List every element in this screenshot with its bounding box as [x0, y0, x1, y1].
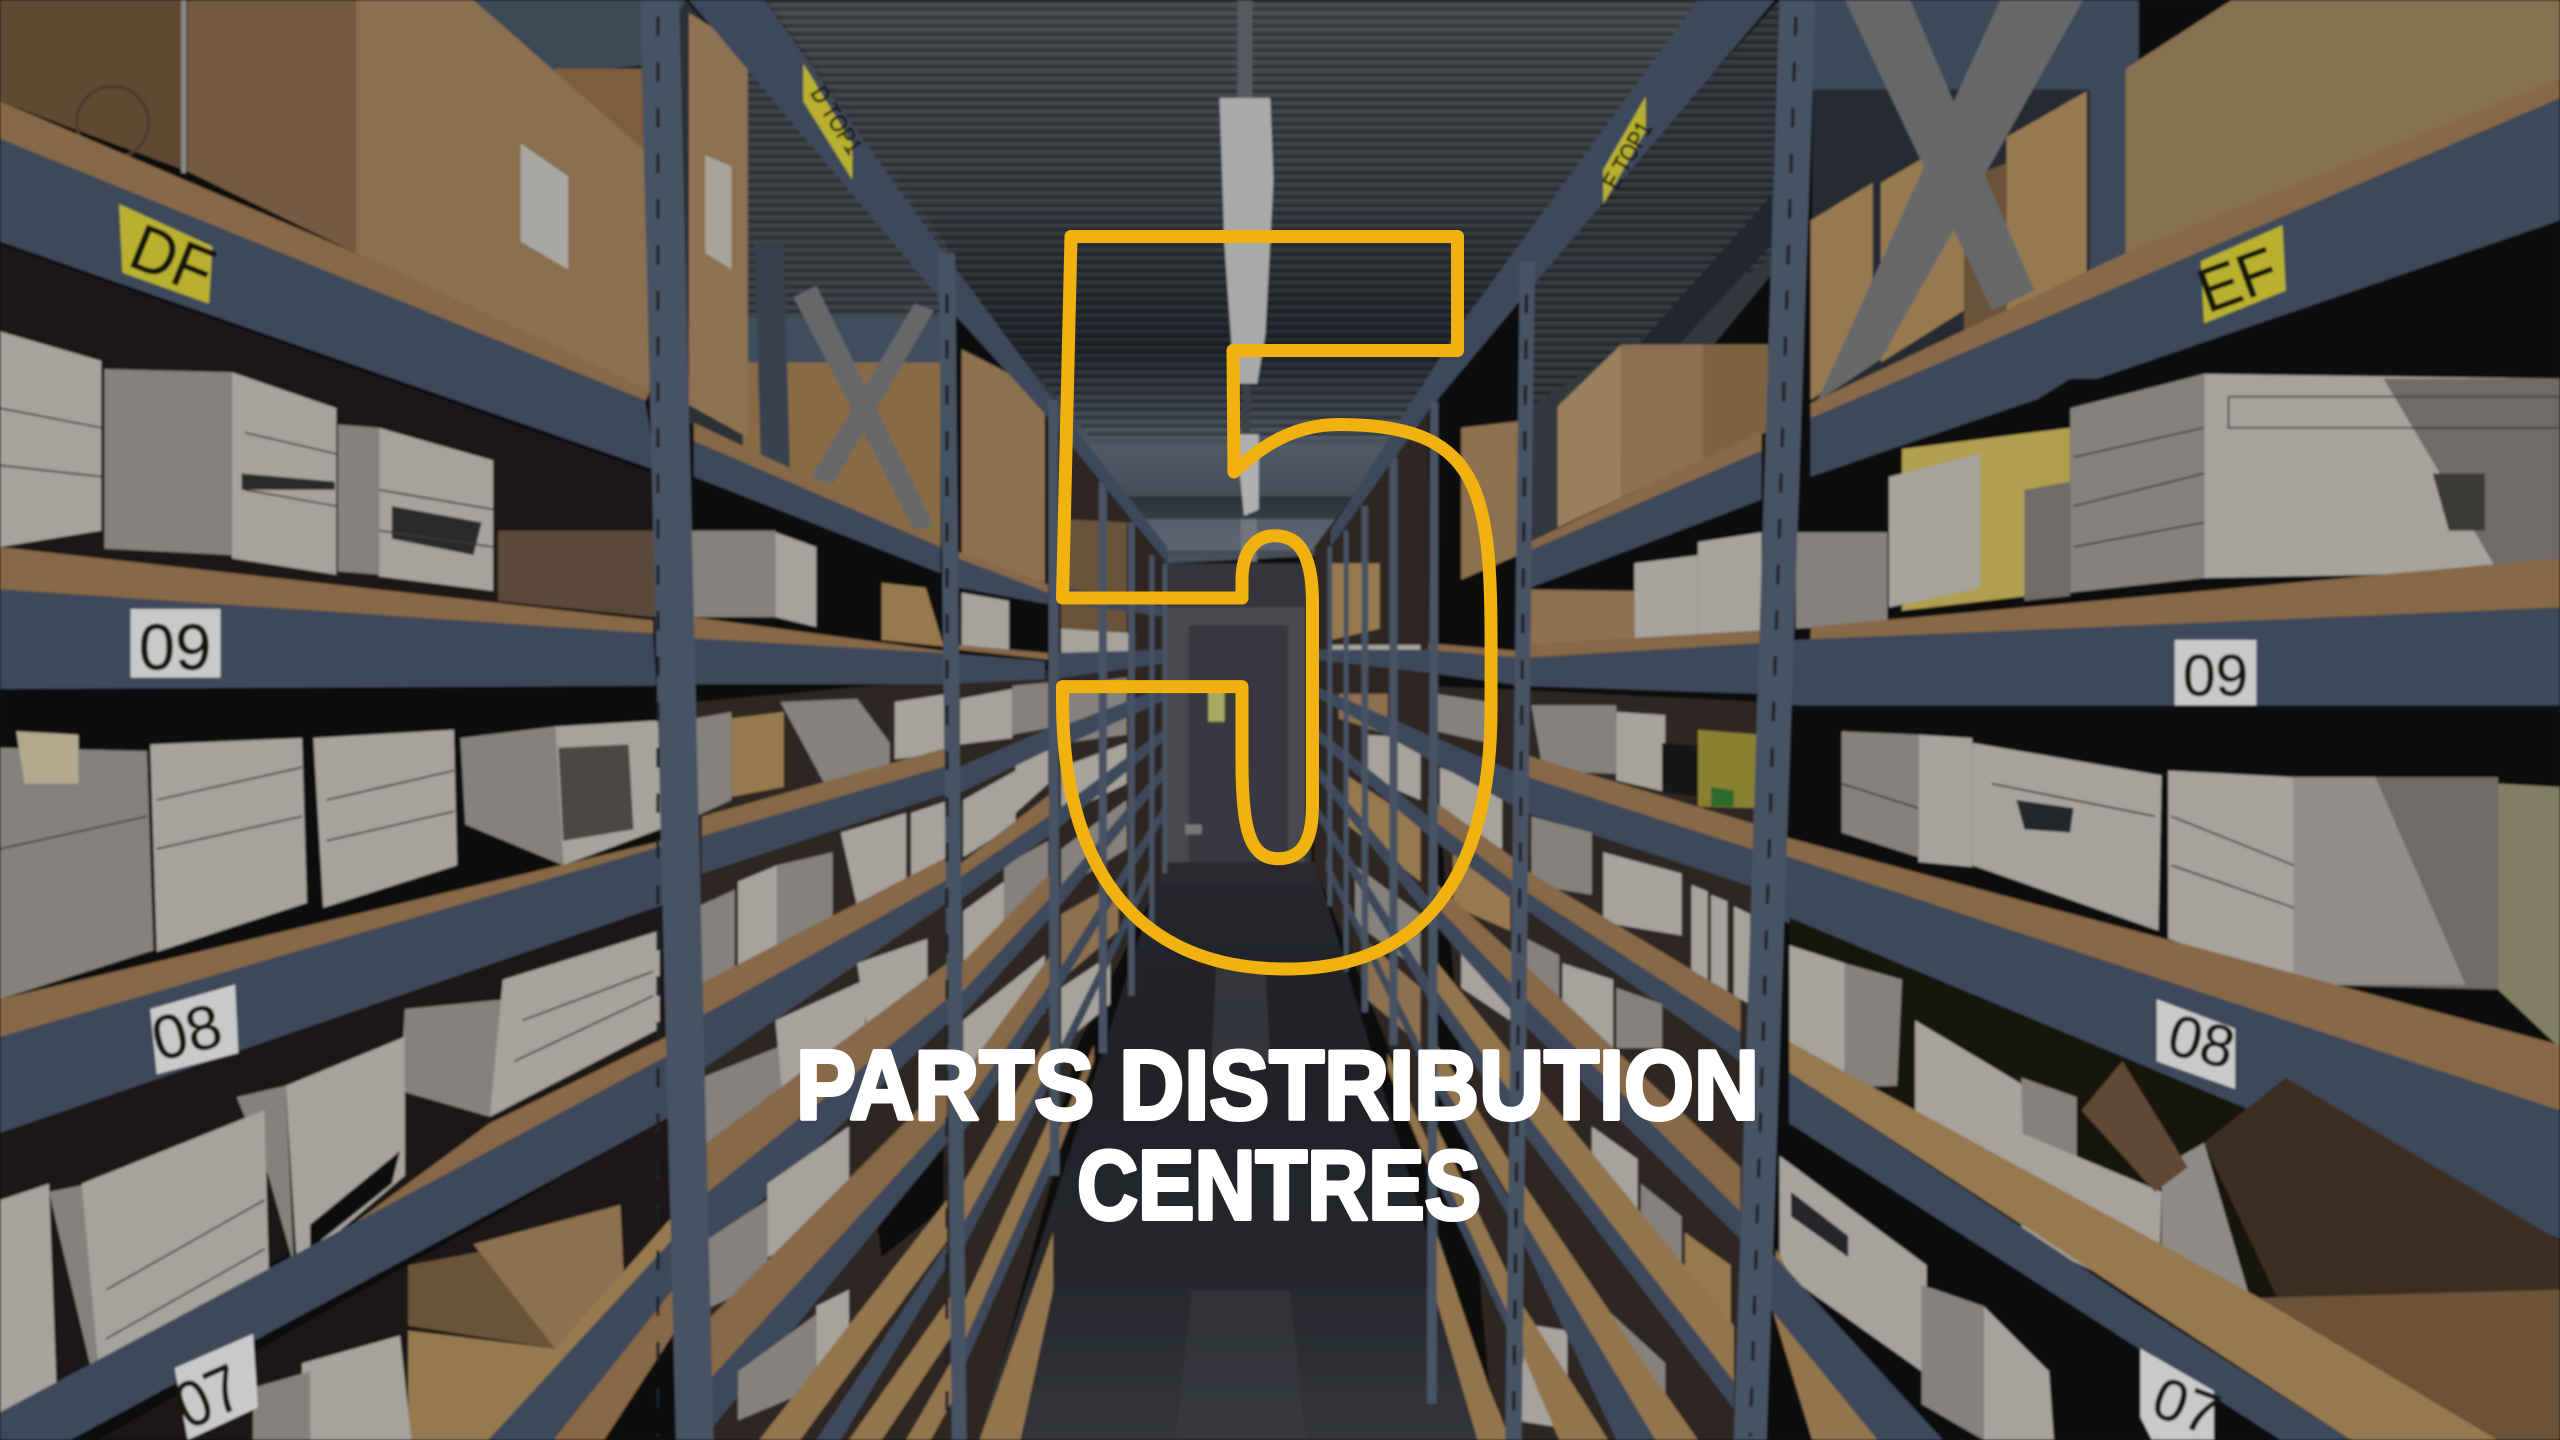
back wall and door — [1164, 563, 1311, 865]
right shelf posts — [1427, 0, 1816, 1440]
label: DF: DF — [120, 210, 224, 309]
label: 09 right: 09 — [2183, 644, 2248, 709]
right shelf 2 contents — [1429, 374, 2560, 728]
left foreground top boxes — [0, 0, 650, 392]
ceiling — [718, 0, 1731, 563]
label: 08 right: 08 — [2162, 1003, 2241, 1081]
left shelf 2 contents — [0, 245, 1048, 735]
left shelf labels — [119, 204, 258, 1440]
right shelf 5 contents — [1768, 1156, 2054, 1440]
right wall backdrop — [1429, 0, 2560, 1440]
left shelf 3 contents — [0, 682, 1048, 1133]
right top beam with E Top1 label — [1331, 0, 1775, 547]
left far bays — [1053, 408, 1167, 1167]
ceiling light fixture — [1220, 0, 1273, 562]
label: 09 left: 09 — [139, 610, 211, 683]
left top beam with D Top1 label — [689, 0, 1167, 563]
left shelf posts — [640, 0, 1060, 1440]
right shelf 1 beam and cork — [1530, 78, 2560, 588]
right top bay — [1461, 0, 2139, 580]
left shelf 1 beam and cork — [0, 101, 656, 539]
left wall backdrop — [0, 0, 1053, 1440]
right far bays — [1314, 392, 1429, 1167]
floor — [976, 862, 1489, 1440]
right shelf 3 contents — [1523, 705, 2560, 1239]
right foreground top box — [2126, 0, 2560, 253]
left bay 1 lower shelves — [699, 645, 1053, 1440]
right bay 1 lower shelves — [1429, 694, 1750, 1440]
left top beam with D Top1 label: D TOP1 — [805, 81, 868, 159]
left shelf 5 contents — [98, 1117, 702, 1440]
left top bay and boxes — [473, 0, 1045, 583]
title: PARTS DISTRIBUTION — [796, 1030, 1759, 1140]
label: 08 left: 08 — [145, 991, 229, 1075]
right shelf labels — [2140, 225, 2287, 1440]
left shelf 4 contents — [0, 903, 669, 1440]
right mid bay backdrop — [1429, 686, 1763, 1440]
right shelf 4 contents — [1789, 918, 2560, 1440]
right top beam with E Top1 label: E TOP1 — [1597, 116, 1658, 194]
left mid bay backdrop — [694, 669, 1053, 1440]
label: EF: EF — [2189, 235, 2287, 327]
title: CENTRES — [1077, 1130, 1481, 1240]
title — [796, 1030, 1759, 1240]
big outlined numeral 5 — [1062, 236, 1491, 969]
